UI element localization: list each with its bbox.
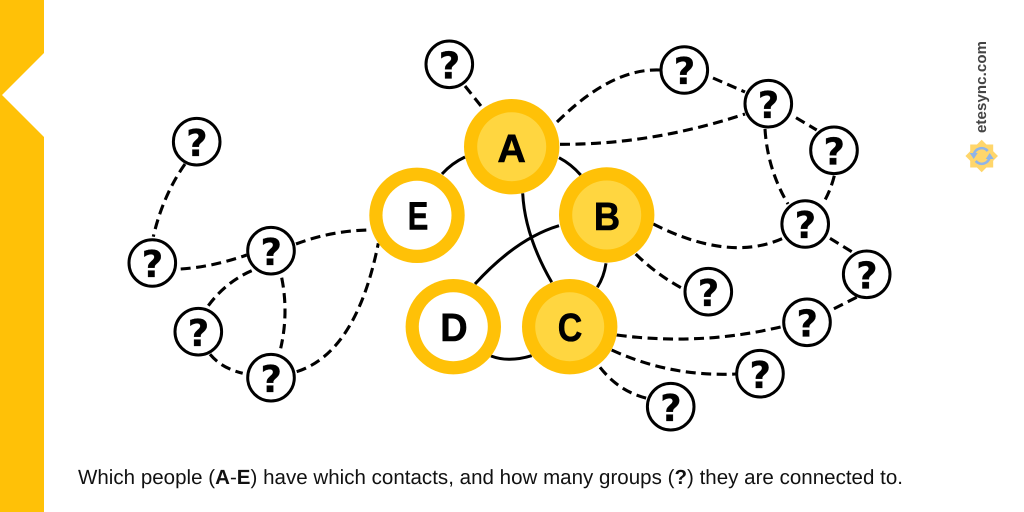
- person C: [522, 279, 617, 374]
- group node left: ?: [260, 358, 282, 401]
- group node top: [426, 41, 473, 88]
- person B: [559, 167, 654, 263]
- group node: [661, 47, 708, 93]
- brand name: etesync.com: [973, 41, 990, 133]
- caption: Which people (A-E) have which contacts, and how many groups (?) they are connected to.: [78, 466, 903, 489]
- group node left: [248, 354, 294, 401]
- group node top: ?: [439, 44, 460, 88]
- group node: [811, 127, 857, 174]
- person A: [464, 99, 559, 194]
- group node: [647, 383, 694, 430]
- group node: ?: [660, 387, 682, 430]
- person D: [406, 279, 501, 374]
- group node: ?: [758, 84, 779, 127]
- person E: E: [408, 194, 428, 238]
- solid connections between people: [442, 157, 606, 359]
- person B: B: [594, 195, 620, 239]
- group node: ?: [795, 204, 816, 247]
- group node: ?: [823, 130, 845, 174]
- group node left: ?: [188, 312, 209, 355]
- person E: [369, 168, 465, 263]
- group node: [782, 201, 828, 247]
- group node left: [175, 308, 222, 355]
- left notched bar: [0, 0, 44, 512]
- icon: etesync logo: [965, 140, 998, 172]
- group node: [737, 350, 783, 397]
- group node left: [248, 227, 294, 274]
- group node left: ?: [142, 243, 163, 286]
- group node left: [129, 240, 176, 286]
- group node: ?: [796, 302, 818, 346]
- person A: A: [497, 127, 526, 171]
- group node: ?: [698, 272, 719, 315]
- group node: [745, 80, 792, 127]
- group node left: ?: [260, 231, 282, 274]
- group node left: [173, 118, 220, 165]
- group node: [843, 251, 890, 298]
- group node: [784, 299, 830, 346]
- group node: ?: [749, 354, 771, 397]
- group node: [685, 268, 732, 315]
- group node: ?: [856, 254, 878, 298]
- person D: D: [440, 306, 468, 350]
- person C: C: [558, 306, 582, 350]
- dashed connections to groups: [153, 70, 857, 398]
- group node left: ?: [186, 122, 208, 165]
- group node: ?: [674, 50, 695, 93]
